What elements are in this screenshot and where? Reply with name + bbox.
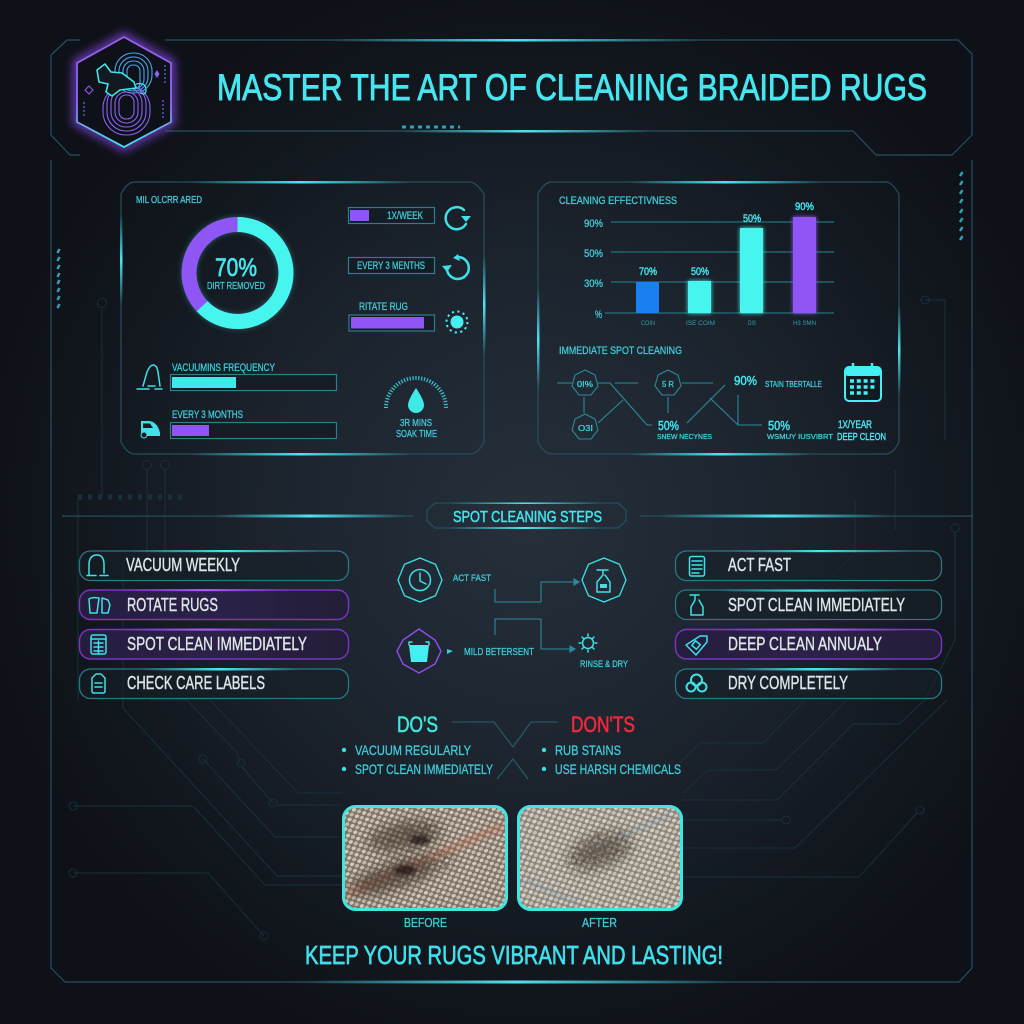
- list right: act fast: [676, 550, 942, 580]
- bar chart: COIN: [641, 320, 655, 327]
- list left: rotate rugs: ROTATE RUGS: [127, 595, 218, 615]
- bar: vacuuming frequency: VACUUMINS FREQUENCY: [172, 362, 275, 374]
- node network diagram: 1X/YEAR: [838, 419, 872, 431]
- list left: rotate rugs: [80, 589, 348, 620]
- bar: every 3 months: [348, 258, 434, 274]
- node network diagram: 0I%: [577, 380, 593, 389]
- icon: vacuum: [137, 365, 162, 389]
- label: before: BEFORE: [404, 916, 447, 930]
- bar chart: 50%: [584, 248, 603, 260]
- side tick marks right: [960, 172, 962, 240]
- dos and donts cross lines: [452, 722, 558, 779]
- list: do's: [342, 743, 493, 777]
- heading pill: spot cleaning steps: [427, 502, 626, 529]
- bar chart: 50%: [691, 266, 709, 278]
- bar chart: H3 SMN: [793, 320, 816, 327]
- gauge: soak time: [386, 378, 446, 440]
- divider right: [640, 514, 973, 518]
- bar: 1x per week: 1X/WEEK: [387, 210, 423, 222]
- bar chart: 50%: [743, 213, 761, 225]
- bar chart: 90%: [584, 218, 603, 230]
- node network diagram: SNEW NECYNES: [657, 432, 712, 441]
- network heading: IMMEDIATE SPOT CLEANING: [559, 345, 682, 357]
- list right: dry completely: [676, 668, 942, 698]
- bar: 1x per week: [348, 208, 434, 224]
- list left: vacuum weekly: [80, 550, 348, 580]
- list right: spot clean immediately: [676, 590, 942, 620]
- icon: clockwise arrow: [446, 207, 471, 229]
- node network diagram: STAIN TBERTALLE: [765, 380, 822, 389]
- side tick marks left: [58, 249, 60, 308]
- label: after: AFTER: [582, 916, 617, 930]
- list left: spot clean immediately: SPOT CLEAN IMMEDIATELY: [127, 634, 307, 654]
- list: don'ts: USE HARSH CHEMICALS: [555, 762, 681, 777]
- bar chart: 30%: [584, 278, 603, 290]
- bar: every 3 months second: [170, 409, 336, 438]
- logo badge: hexagon with fingerprint and hand: [77, 37, 171, 147]
- bar chart: DIS: [748, 320, 756, 327]
- list right: deep clean annually: [676, 628, 942, 659]
- chart heading: CLEANING EFFECTIVNESS: [559, 195, 677, 207]
- header frame: [51, 39, 972, 155]
- heading pill: spot cleaning steps: SPOT CLEANING STEPS: [453, 509, 602, 526]
- node network diagram: DEEP CLEON: [837, 431, 886, 443]
- step connector arrows: [495, 579, 579, 652]
- icon: sun: [446, 312, 468, 332]
- step: spot spray: [582, 558, 626, 602]
- circuit background traces: [69, 296, 959, 940]
- node network diagram: 5 R: [662, 380, 674, 389]
- list right: dry completely: DRY COMPLETELY: [728, 673, 848, 693]
- bar: every 3 months second: EVERY 3 MONTHS: [172, 409, 243, 421]
- outer frame: [51, 160, 972, 982]
- heading: do's: DO'S: [397, 712, 438, 737]
- bar: rotate rug: RITATE RUG: [359, 301, 408, 313]
- node network diagram: O3I: [578, 424, 593, 433]
- bar chart: %: [595, 309, 602, 321]
- list: don'ts: [542, 743, 681, 777]
- frame bottom glow: [300, 980, 730, 984]
- bar: every 3 months: EVERY 3 MENTHS: [357, 260, 425, 272]
- bar: rotate rug: [349, 301, 434, 331]
- donut chart: 70% dirt removed: DIRT REMOVED: [207, 281, 265, 292]
- list left: check care labels: [80, 668, 348, 698]
- step: rinse and dry: RINSE & DRY: [580, 659, 629, 670]
- node network diagram: 90%: [734, 373, 757, 388]
- list left: spot clean immediately: [80, 628, 348, 659]
- panel heading: MIL OLCRR ARED: [136, 195, 202, 206]
- icon: calendar: [845, 363, 881, 401]
- gauge: soak time: SOAK TIME: [396, 428, 437, 440]
- bar chart: ISE COIM: [686, 320, 715, 327]
- bar chart: [584, 201, 834, 327]
- node network diagram: [557, 370, 886, 443]
- step: act fast: [398, 558, 491, 602]
- list right: act fast: ACT FAST: [728, 555, 791, 575]
- step: rinse and dry: [579, 634, 629, 670]
- icon: cart: [141, 421, 160, 438]
- list left: check care labels: CHECK CARE LABELS: [127, 673, 265, 693]
- bar chart: 70%: [639, 266, 657, 278]
- list: do's: SPOT CLEAN IMMEDIATELY: [355, 762, 493, 777]
- donut chart: 70% dirt removed: [189, 224, 286, 322]
- heading: don'ts: DON'TS: [571, 712, 635, 737]
- node network diagram: 50%: [768, 418, 790, 433]
- step: mild detergent: MILD BETERSENT: [464, 647, 534, 658]
- photo: after: [518, 806, 682, 910]
- photo: before: [343, 806, 506, 910]
- icon: counter-clockwise arrow: [442, 254, 469, 279]
- bar: vacuuming frequency: [170, 362, 336, 390]
- node network diagram: WSMUY IUSVIBRT: [767, 432, 833, 441]
- step: mild detergent: [397, 629, 534, 673]
- list left: vacuum weekly: VACUUM WEEKLY: [126, 555, 240, 575]
- list right: spot clean immediately: SPOT CLEAN IMMEDIATELY: [728, 595, 905, 615]
- list right: deep clean annually: DEEP CLEAN ANNUALY: [728, 634, 882, 654]
- bar chart: 90%: [795, 201, 814, 213]
- list: don'ts: RUB STAINS: [555, 743, 621, 758]
- footer tagline: KEEP YOUR RUGS VIBRANT AND LASTING!: [305, 940, 723, 970]
- list: do's: VACUUM REGULARLY: [355, 743, 471, 758]
- panel: dirt removal and schedule: [120, 181, 486, 456]
- divider left: [62, 514, 413, 518]
- node network diagram: 50%: [658, 418, 679, 433]
- gauge: soak time: 3R MINS: [400, 417, 432, 429]
- step: act fast: ACT FAST: [453, 573, 491, 584]
- panel: cleaning effectiveness: [537, 181, 900, 456]
- donut chart: 70% dirt removed: 70%: [215, 254, 257, 282]
